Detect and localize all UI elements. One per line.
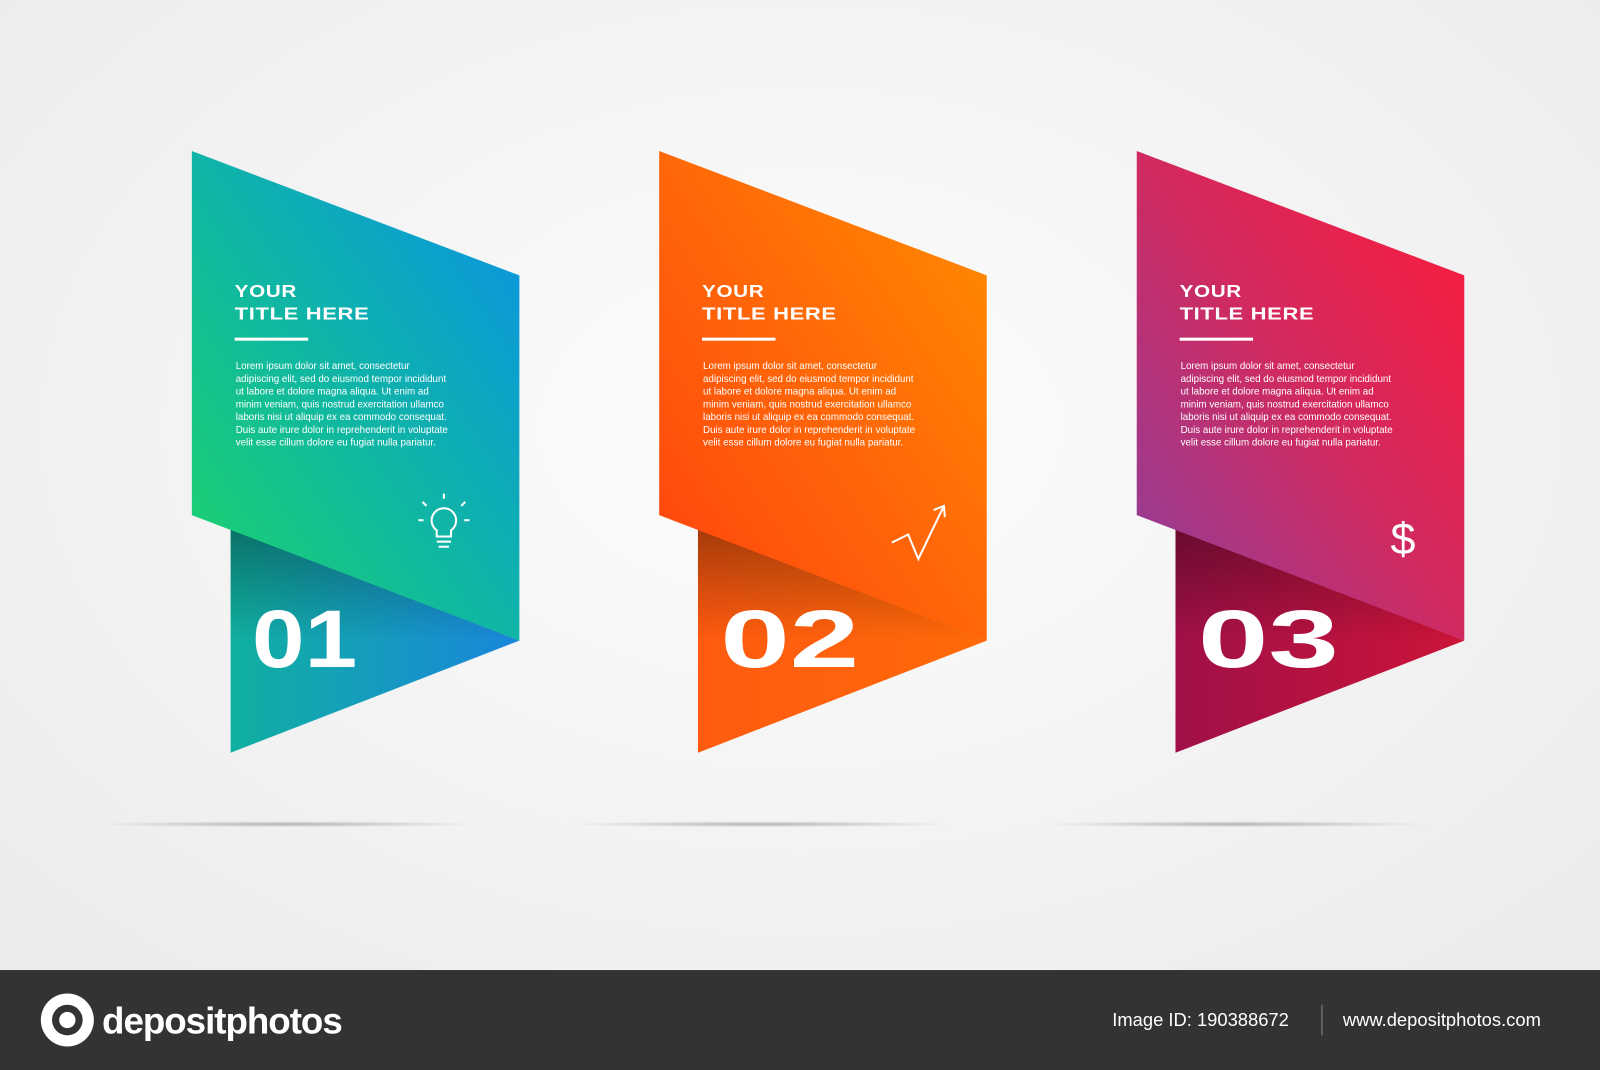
panel: step 01 — [192, 151, 519, 753]
panel: step 02: velit esse cillum dolore eu fugiat nulla pariatur. — [703, 438, 903, 449]
number 02: 02 — [720, 594, 859, 685]
icon: growth arrow — [892, 506, 945, 559]
panel: step 02: Lorem ipsum dolor sit amet, consectetur — [703, 361, 877, 372]
panel: step 02: minim veniam, quis nostrud exercitation ullamco — [703, 399, 912, 410]
icon: dollar: $ — [1391, 513, 1416, 564]
body text 01: velit esse cillum dolore eu fugiat nulla pariatur. — [236, 438, 436, 449]
footer bar: Image ID: 190388672 — [1112, 1009, 1289, 1030]
footer bar: www.depositphotos.com — [1342, 1009, 1541, 1030]
heading 01: YOUR — [235, 281, 297, 301]
panel: step 03: adipiscing elit, sed do eiusmod tempor incididunt — [1181, 374, 1391, 385]
panel: step 02: ut labore et dolore magna aliqua. Ut enim ad — [703, 387, 896, 398]
body text 01: Lorem ipsum dolor sit amet, consectetur — [236, 361, 410, 372]
panel: step 03: velit esse cillum dolore eu fugiat nulla pariatur. — [1181, 438, 1381, 449]
body text 01: minim veniam, quis nostrud exercitation ullamco — [236, 399, 445, 410]
body text 01: laboris nisi ut aliquip ex ea commodo consequat. — [236, 412, 447, 423]
footer bar: depositphotos — [102, 1000, 342, 1041]
panel: step 02: TITLE HERE — [702, 303, 837, 323]
footer bar — [0, 970, 1600, 1070]
panel: step 02 — [659, 151, 987, 753]
body text 01: Duis aute irure dolor in reprehenderit in voluptate — [236, 425, 448, 436]
panel: step 03: ut labore et dolore magna aliqua. Ut enim ad — [1181, 387, 1374, 398]
panel: step 03: Duis aute irure dolor in reprehenderit in voluptate — [1181, 425, 1393, 436]
number 01: 01 — [252, 594, 357, 685]
body text 01: ut labore et dolore magna aliqua. Ut enim ad — [236, 387, 429, 398]
panel: step 02: Duis aute irure dolor in reprehenderit in voluptate — [703, 425, 915, 436]
panel: step 02: laboris nisi ut aliquip ex ea commodo consequat. — [703, 412, 914, 423]
panel: step 03: Lorem ipsum dolor sit amet, consectetur — [1181, 361, 1355, 372]
panel: step 03: laboris nisi ut aliquip ex ea commodo consequat. — [1181, 412, 1392, 423]
panel: step 03: YOUR — [1180, 281, 1242, 301]
panel: step 02: YOUR — [702, 281, 764, 301]
floor shadows — [92, 821, 1429, 827]
panel: step 03: minim veniam, quis nostrud exercitation ullamco — [1181, 399, 1389, 410]
number 03: 03 — [1198, 594, 1339, 685]
panel: step 02: adipiscing elit, sed do eiusmod tempor incididunt — [703, 374, 914, 385]
heading 01: TITLE HERE — [235, 303, 369, 323]
body text 01: adipiscing elit, sed do eiusmod tempor incididunt — [236, 374, 446, 385]
icon: lightbulb — [418, 494, 469, 547]
panel: step 03 — [1137, 151, 1464, 753]
panel: step 03: TITLE HERE — [1180, 303, 1314, 323]
